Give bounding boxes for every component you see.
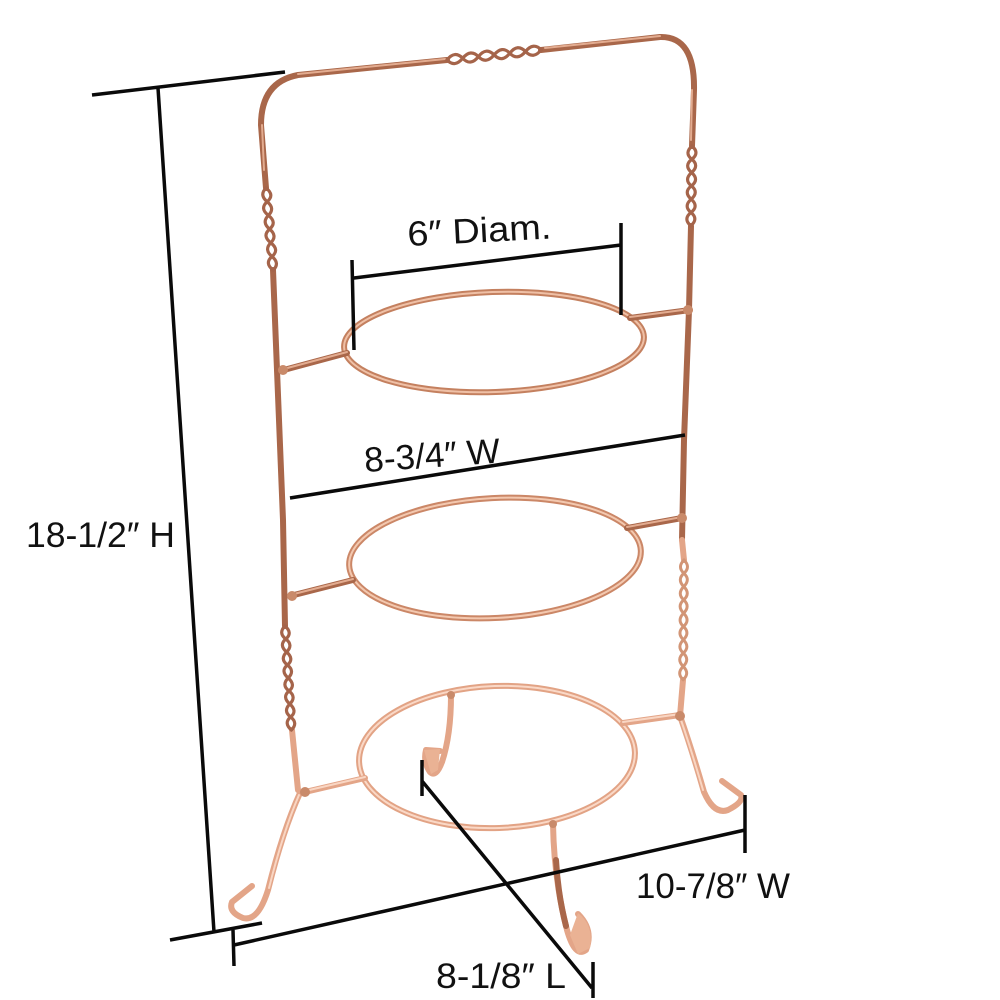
label: ring diameter: 6″ Diam. <box>406 208 552 254</box>
label: base length: 8-1/8″ L <box>436 957 566 996</box>
label: tier width: 8-3/4″ W <box>363 432 501 480</box>
frame: left post <box>277 370 298 790</box>
twist: lower left <box>282 626 295 730</box>
twist: upper left <box>263 188 276 270</box>
dimension: base length <box>422 760 593 998</box>
right leg with hook <box>680 716 741 811</box>
dimension: ring diameter <box>352 223 621 350</box>
label: base width: 10-7/8″ W <box>636 867 790 906</box>
tier 1: top ring and arms <box>278 287 693 397</box>
label: height: 18-1/2″ H <box>26 516 175 555</box>
twist: top bar <box>447 46 541 64</box>
dimension: tier width <box>290 435 685 498</box>
left leg with hook <box>231 793 300 918</box>
tier 3: bottom ring and arms <box>300 681 685 833</box>
twist: upper right <box>687 146 696 226</box>
frame: right post <box>680 310 689 716</box>
dimension: base width <box>233 795 745 966</box>
back foot <box>424 691 455 774</box>
stand frame <box>231 36 741 918</box>
dimension: height <box>92 72 285 940</box>
front foot <box>549 820 591 954</box>
frame: upper arch <box>261 36 694 370</box>
twist: lower right <box>680 560 687 680</box>
tier 2: middle ring and arms <box>287 490 687 626</box>
